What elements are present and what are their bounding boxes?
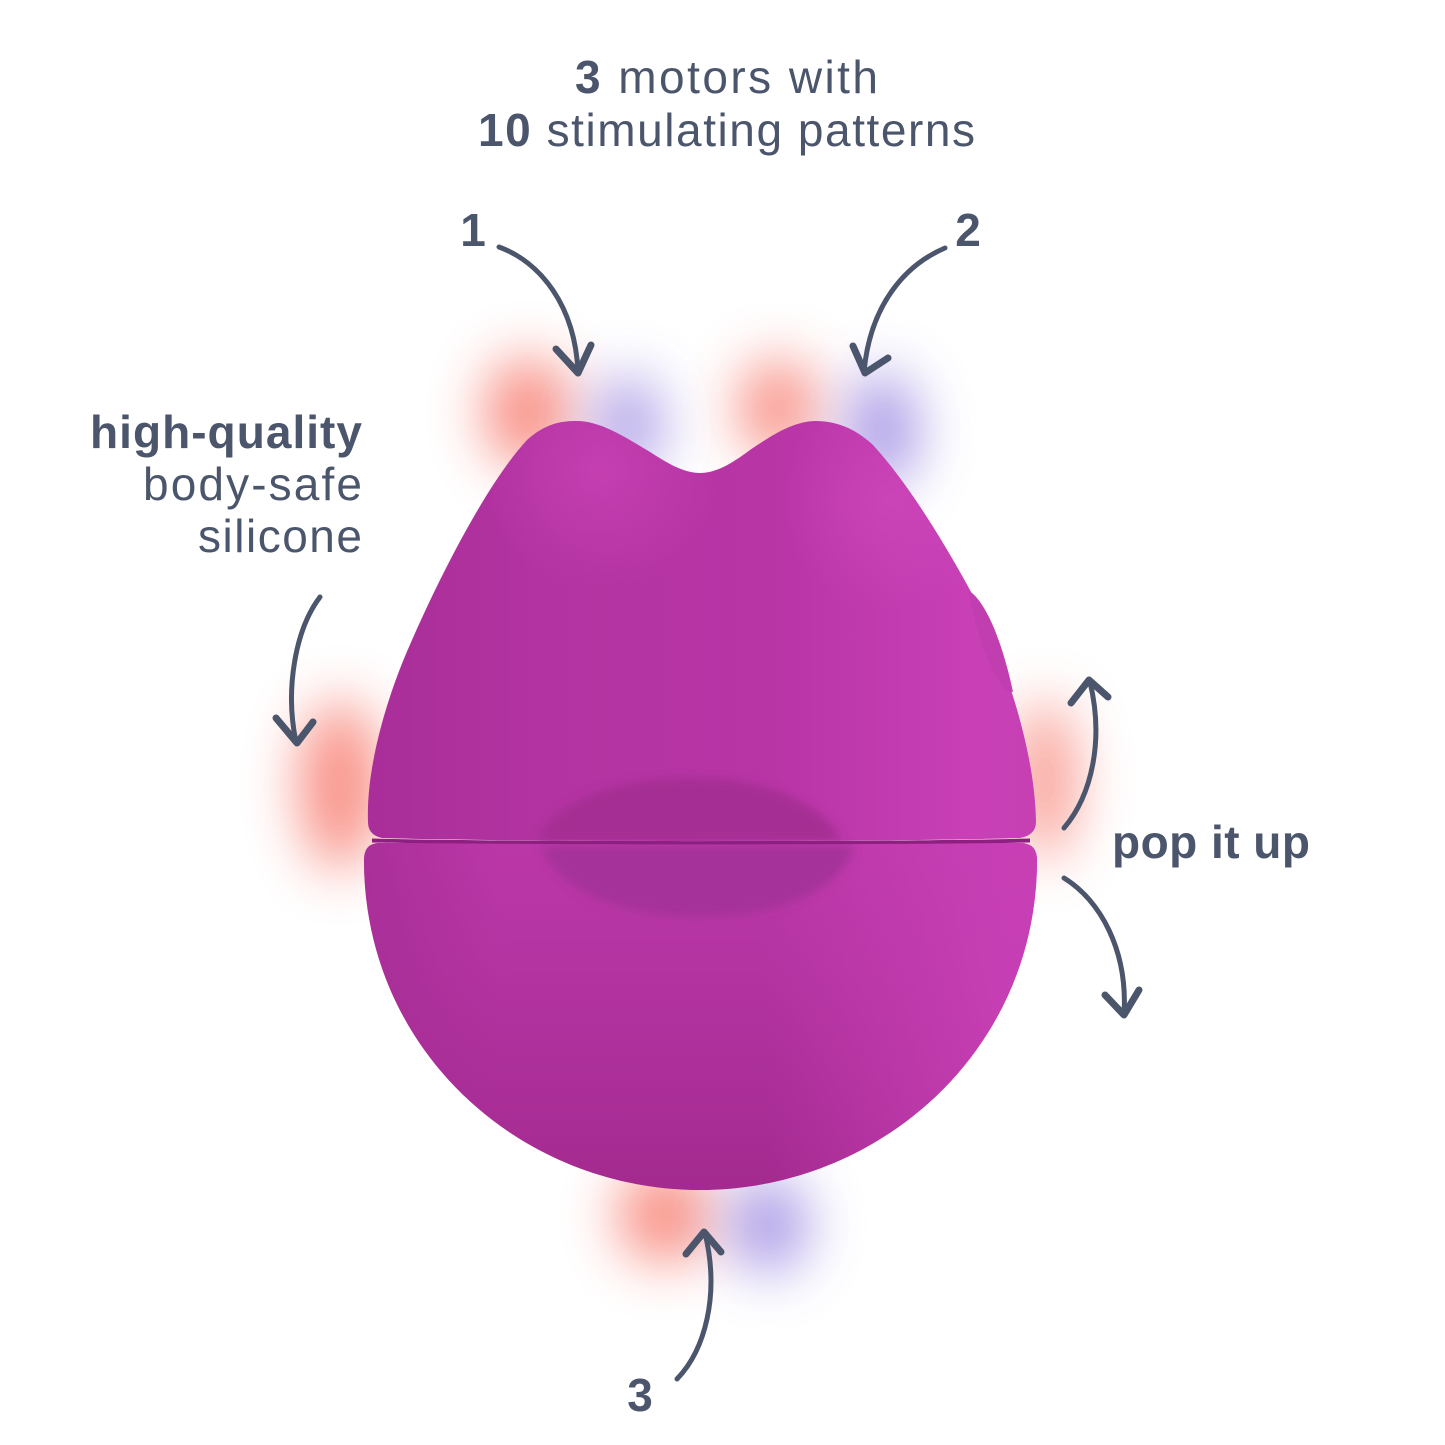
product: bottom half [364, 838, 1037, 1190]
text: pop it up: pop it up [1112, 816, 1310, 868]
heading: motors: 3 motors with [575, 51, 878, 103]
label: motor 3: 3 [627, 1369, 653, 1421]
arrow: pop up [1064, 680, 1108, 828]
text: high-quality body-safe silicone: silicone [198, 510, 362, 562]
text: high-quality body-safe silicone [90, 406, 362, 562]
arrow: motor 3 [677, 1232, 721, 1379]
seam line [372, 838, 1030, 844]
text: high-quality body-safe silicone: body-safe [143, 458, 362, 510]
arrow: motor 1 [499, 247, 591, 373]
label: motor 2: 2 [955, 204, 981, 256]
heading: motors [478, 51, 975, 156]
arrow: silicone [276, 597, 320, 743]
product: top half [368, 421, 1036, 841]
heading: motors: 10 stimulating patterns [478, 104, 975, 156]
text: high-quality body-safe silicone: high-quality [90, 406, 362, 458]
lower lip recess [540, 846, 855, 917]
upper lip recess [538, 778, 842, 840]
label: motor 1: 1 [460, 204, 486, 256]
glows around product [300, 357, 1075, 1273]
side button [968, 590, 1013, 692]
arrow: motor 2 [853, 248, 945, 373]
arrow: pop down [1064, 878, 1139, 1015]
